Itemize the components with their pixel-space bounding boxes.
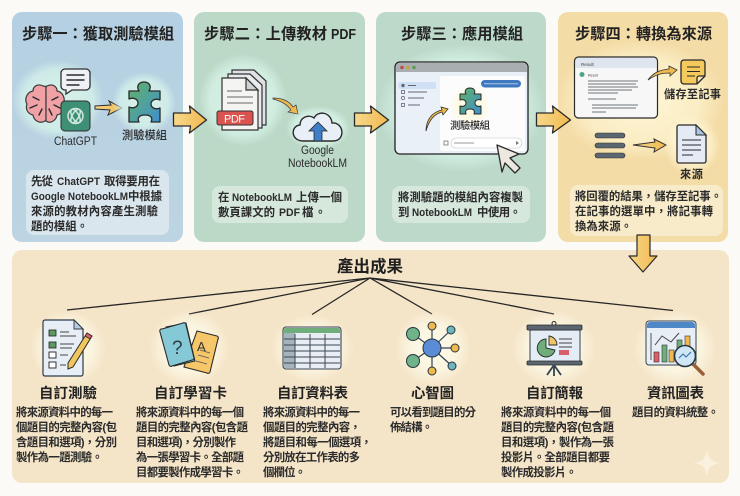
text: custom quiz [16,405,118,464]
icon: source document [664,115,720,175]
panel: outputs [12,250,729,483]
label: Google NotebookLM: Google [301,143,334,157]
icon: presentation board [527,322,582,376]
text: mind map: 可以看到題目的分 [390,405,477,419]
heading: step 3: 步驟三：應用模組 [401,25,523,43]
description: step 2: NotebookLM [232,192,292,204]
output: custom flashcards [136,310,249,479]
text: custom quiz: 製作為一題測驗。 [16,450,103,464]
description: step 1 [26,170,169,235]
description: step 3 [392,186,530,223]
text: custom flashcards: 目和選項)，分別製作 [136,435,237,449]
icon: PDF documents [199,54,287,146]
icon: menu lines [595,133,625,158]
arrow: step 3 to 4 [536,106,570,133]
description: step 2 [212,186,348,223]
label: quiz template: 測驗模組 [122,128,167,142]
heading: step 4: 步驟四：轉換為來源 [575,25,712,43]
description: step 1: 取得要用在 [104,174,160,188]
icon: puzzle [112,72,176,134]
text: custom flashcards [136,405,249,479]
text: custom flashcards: 目都要製作成學習卡。 [136,465,244,479]
icon: result card [556,40,724,160]
output: custom quiz [16,310,118,464]
text: custom data table: 個欄位。 [263,465,306,479]
icon: flashcards: A [197,339,206,354]
description: step 1: 題的模組。 [31,219,88,233]
heading: step 2: 步驟二：上傳教材 [204,25,327,43]
description: step 3: 到 [398,206,409,219]
icon: browser window [377,44,545,172]
output: custom data table [263,314,372,479]
icon: cloud upload [286,106,350,150]
heading: infographic: 資訊圖表 [647,384,705,402]
text: custom slides: 製作成投影片。 [501,465,577,479]
text: custom slides: 投影片。全部題目都要 [501,450,610,464]
text: custom flashcards: 將來源資料中的每一個 [136,405,244,419]
text: custom flashcards: 為一張學習卡。全部題 [136,450,245,464]
panel: step 2 [194,12,365,242]
icon: note [681,60,705,84]
description: step 2: PDF [279,207,300,219]
heading: custom slides: 自訂簡報 [526,384,584,402]
description: step 1: Google NotebookLM [31,191,128,203]
icon: mind map [406,322,459,375]
text: custom data table: 分別放在工作表的多 [263,450,360,464]
note lines [687,67,700,76]
text: custom quiz: 含題目和選項)，分別 [16,435,117,449]
description: step 4 [570,185,723,236]
icon: result card: Result [588,74,598,78]
description: step 2: 上傳一個 [296,190,342,204]
text: mind map [390,405,477,434]
description: step 4: 將回覆的結果，儲存至記事。 [575,189,722,203]
arrow: menu to source [633,139,666,152]
text: custom slides: 題目的完整內容(包含題 [501,420,615,434]
text: custom quiz: 個題目的完整內容(包 [16,420,118,434]
description: step 1: ChatGPT [57,176,100,188]
text: custom slides [501,405,615,479]
arrow: paste into window [426,107,448,131]
heading: step 2: PDF [331,26,356,43]
icon: cursor [497,145,520,173]
label: quiz template in browser: 測驗模組 [450,119,490,132]
description: step 1: 來源的教材內容產生測驗 [31,204,159,218]
text: custom data table: 將題目和每一個選項， [263,435,372,449]
output: custom slides [501,310,615,479]
description: step 3: 將測驗題的模組內容複製 [398,190,524,204]
icon: table [283,327,341,369]
panel: step 1 [12,12,183,242]
text: custom flashcards: 題目的完整內容(包含題 [136,420,249,434]
description: step 4: 換為來源。 [575,219,632,233]
heading: custom data table: 自訂資料表 [277,384,349,402]
label: Google NotebookLM [288,143,347,170]
icon: PDF documents: PDF [224,114,245,126]
text: mind map: 佈結構。 [390,420,433,434]
text: custom data table: 將來源資料中的每一 [263,405,360,419]
heading: custom flashcards: 自訂學習卡 [154,384,227,402]
arrow: step 2 to 3 [354,106,388,133]
icon: flashcards: ? [172,338,183,359]
arrow: PDF to NotebookLM [273,98,298,114]
icon: chart with magnifier [646,321,703,374]
panel: step 3 [376,12,546,242]
heading: outputs: 產出成果 [337,256,404,276]
description: step 3: NotebookLM [412,207,472,219]
label: save to note: 儲存至記事 [664,87,721,101]
description: step 4: 在記事的選單中，將記事轉 [575,204,714,218]
output: infographic [632,310,719,419]
text: custom slides: 將來源資料中的每一個 [501,405,611,419]
arrow: ChatGPT to puzzle [95,101,122,115]
arrow: step 4 to outputs [629,235,657,272]
description: step 3: 中使用。 [477,205,521,219]
heading: step 1: 步驟一：獲取測驗模組 [22,25,174,43]
text: custom data table: 個題目的完整內容， [263,420,361,434]
icon: flashcards [160,323,218,373]
text: custom quiz: 將來源資料中的每一 [16,405,113,419]
label: source: 來源 [680,167,703,181]
description: step 2: 檔。 [302,205,326,219]
description: step 1: 中根據 [128,189,163,203]
heading: mind map: 心智圖 [411,384,454,402]
panel: step 4 [556,12,728,242]
arrow: step 1 to 2 [174,106,206,133]
icon: brain with ChatGPT [12,60,104,140]
arrow: result to note [648,66,677,80]
icon: result card: Result [581,62,595,67]
description: step 2: 數頁課文的 [218,205,275,219]
icon: checklist and pencil [43,320,92,376]
text: infographic: 題目的資料統整。 [632,405,719,419]
label: ChatGPT: ChatGPT [54,134,97,148]
text: custom slides: 目和選項)，製作為一張 [501,435,615,449]
connector lines [67,278,673,314]
icon: sparkle watermark [694,450,720,476]
output: mind map [390,310,477,434]
description: step 2: 在 [218,190,229,204]
label: Google NotebookLM: NotebookLM [288,156,347,170]
heading: custom quiz: 自訂測驗 [39,384,98,402]
text: custom data table [263,405,372,479]
description: step 1: 先從 [31,174,54,188]
